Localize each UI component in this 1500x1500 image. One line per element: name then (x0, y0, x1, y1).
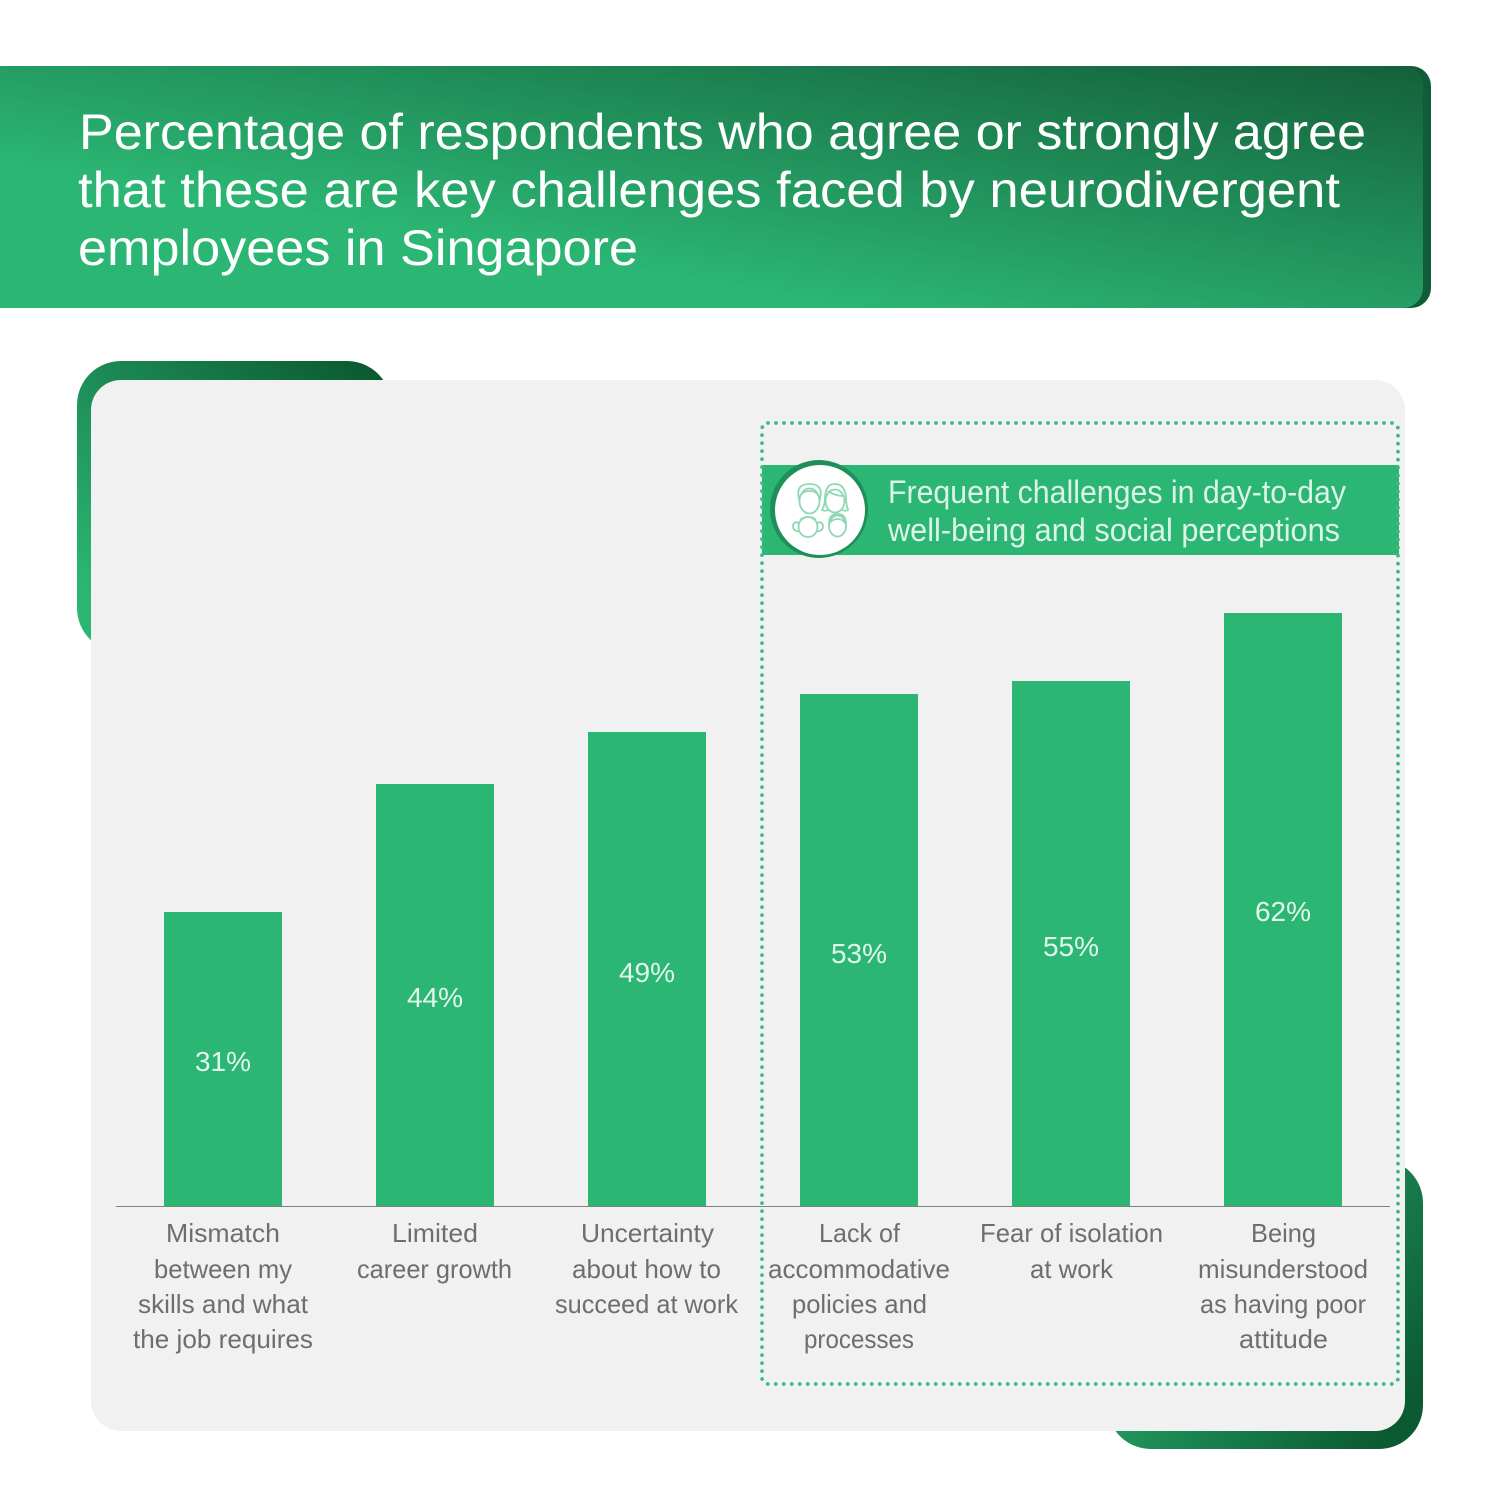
label: Mismatch: skills and what (138, 1289, 309, 1319)
label: Lack of accommodative policies (768, 1218, 950, 1354)
bar: Lack of accommodative policies 53% (800, 694, 918, 1206)
bar: Fear of isolation 55%: 55% (1043, 931, 1099, 962)
label: Fear of isolation: at work (1030, 1254, 1114, 1284)
label: Mismatch: the job requires (133, 1324, 313, 1354)
label: Limited career growth (357, 1218, 512, 1284)
bar: Uncertainty 49% (588, 732, 706, 1206)
bar: Being misunderstood 62% (1224, 613, 1342, 1206)
bar: Lack of accommodative policies 53%: 53% (831, 938, 887, 969)
icon: faces in circle (770, 460, 868, 558)
label: Being misunderstood: misunderstood (1198, 1254, 1368, 1284)
label: Mismatch (133, 1218, 313, 1354)
band text (887, 474, 1346, 548)
bar: Fear of isolation 55% (1012, 681, 1130, 1206)
highlight band (762, 460, 1399, 558)
dotted highlight frame (762, 423, 1398, 1384)
bar chart (116, 613, 1390, 1207)
label: Uncertainty: succeed at work (555, 1289, 739, 1319)
label: Fear of isolation: Fear of isolation (980, 1218, 1163, 1248)
decorative card corner: bottom right (1107, 1159, 1423, 1449)
title banner (0, 66, 1431, 308)
label: Being misunderstood: attitude (1239, 1324, 1328, 1354)
label: Mismatch: Mismatch (166, 1218, 280, 1248)
bar: Mismatch 31%: 31% (195, 1046, 251, 1077)
label: Uncertainty: about how to (572, 1254, 721, 1284)
label: Lack of accommodative policies: processes (804, 1324, 914, 1354)
title (78, 104, 1366, 276)
label: Lack of accommodative policies: accommodative (768, 1254, 950, 1284)
label: Lack of accommodative policies: Lack of (819, 1218, 901, 1248)
title: that these are key challenges faced by neurodivergent (78, 162, 1340, 218)
bar: Uncertainty 49%: 49% (619, 957, 675, 988)
label: Limited career growth: career growth (357, 1254, 512, 1284)
label: Being misunderstood (1198, 1218, 1368, 1354)
label: Mismatch: between my (154, 1254, 292, 1284)
label: Fear of isolation (980, 1218, 1163, 1284)
label: Being misunderstood: Being (1251, 1218, 1316, 1248)
label: Limited career growth: Limited (392, 1218, 478, 1248)
axis line (116, 1206, 1390, 1207)
band text: Frequent challenges in day-to-day (888, 474, 1346, 510)
title: Percentage of respondents who agree or strongly agree (79, 104, 1366, 160)
bar: Limited career growth 44%: 44% (407, 982, 463, 1013)
band text: well-being and social perceptions (887, 512, 1340, 548)
label: Lack of accommodative policies: policies and (792, 1289, 927, 1319)
label: Being misunderstood: as having poor (1200, 1289, 1366, 1319)
bar: Being misunderstood 62%: 62% (1255, 896, 1311, 927)
bar: Mismatch 31% (164, 912, 282, 1206)
panel: chart card (91, 380, 1405, 1431)
title: employees in Singapore (78, 220, 638, 276)
label: Uncertainty: Uncertainty (581, 1218, 714, 1248)
decorative card corner: top left (77, 361, 391, 652)
bar: Limited career growth 44% (376, 784, 494, 1206)
label: Uncertainty (555, 1218, 739, 1319)
